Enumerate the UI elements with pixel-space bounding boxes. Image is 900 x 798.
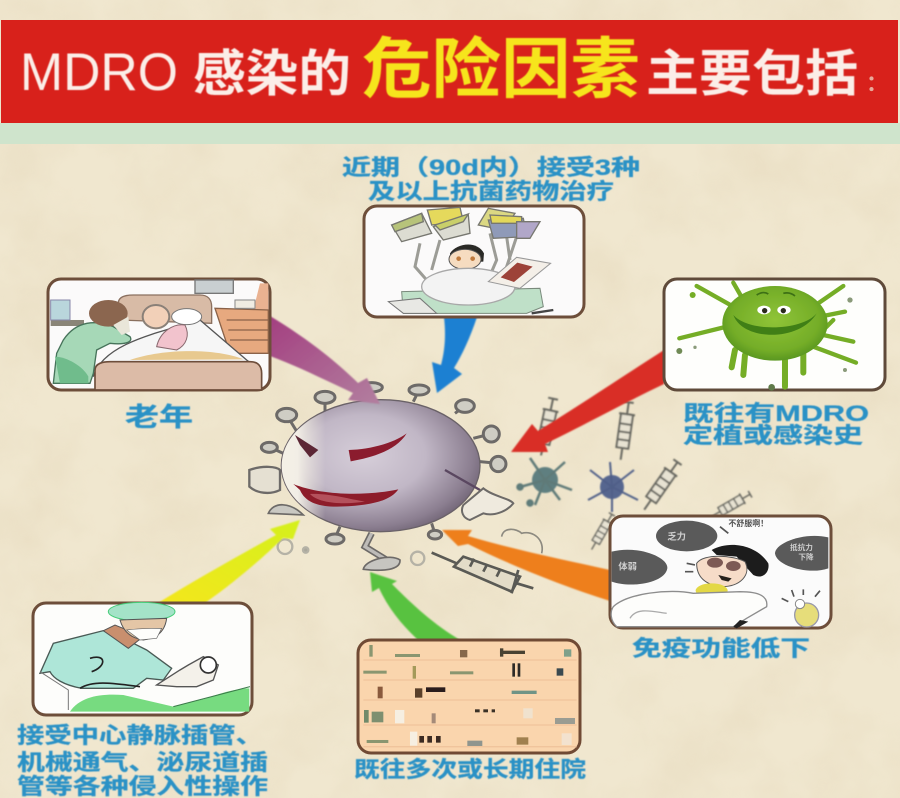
title: white trailing text: 主要包括 xyxy=(646,46,858,102)
arrow: orange from immune panel xyxy=(442,530,610,601)
floor shadows xyxy=(363,660,577,747)
panel frame xyxy=(364,206,584,317)
caption: prior MDRO colonization: 既往有MDRO xyxy=(683,401,869,426)
illustration: nurse and elderly patient xyxy=(51,280,268,390)
virus body xyxy=(281,400,480,532)
virus glove xyxy=(462,488,513,520)
speech bubble words: 体弱 xyxy=(618,560,637,571)
virus eyes xyxy=(295,433,407,461)
virus mouth xyxy=(293,484,398,507)
speech bubble words: 乏力 xyxy=(667,530,686,541)
speech bubble words: 下降 xyxy=(798,551,814,561)
title: white lead text xyxy=(20,43,351,102)
virus legs and feet xyxy=(249,467,400,570)
title: white lead text: MDRO xyxy=(20,43,178,102)
panel frame xyxy=(33,603,252,715)
panel frame xyxy=(48,279,270,390)
caption: invasive procedures: 机械通气、泌尿道插 xyxy=(17,750,268,775)
caption: prior MDRO colonization xyxy=(683,401,869,448)
green band under banner xyxy=(0,123,900,144)
panel frame xyxy=(358,640,580,753)
caption: recent antibiotics: 及以上抗菌药物治疗 xyxy=(368,179,614,204)
title: yellow highlight: 危险因素 xyxy=(362,32,640,106)
decorative bubbles and cloud xyxy=(278,529,542,565)
speech bubble words: 抵抗力 xyxy=(790,542,813,552)
panel: low immunity xyxy=(610,516,831,628)
caption: low immunity: 免疫功能低下 xyxy=(632,636,810,661)
illustration: sick man xyxy=(611,518,828,628)
panel: recent antibiotics xyxy=(364,206,584,317)
germ droplets xyxy=(676,292,853,391)
arrow: purple from elderly panel xyxy=(270,316,380,404)
illustration: surgeon xyxy=(40,602,250,712)
tiny figures xyxy=(363,645,575,746)
caption: invasive procedures xyxy=(17,723,268,798)
arrow: blue from antibiotics panel xyxy=(432,317,477,393)
caption: invasive procedures: 接受中心静脉插管、 xyxy=(17,723,263,748)
illustration: green germ xyxy=(676,283,856,391)
panel: repeated hospitalization xyxy=(358,640,580,753)
arrow: green from hospital panel xyxy=(370,572,460,640)
title: colon: ： xyxy=(866,71,888,96)
small syringe below virus xyxy=(432,553,533,593)
panel frame xyxy=(664,279,885,390)
virus spikes xyxy=(261,383,506,544)
caption: recent antibiotics xyxy=(342,155,640,204)
caption: repeated hospitalization: 既往多次或长期住院 xyxy=(354,757,586,782)
illustration: patient on drips xyxy=(388,207,553,313)
central cartoon virus xyxy=(249,383,542,593)
title: white lead text: 感染的 xyxy=(193,46,351,102)
background syringes and germs xyxy=(518,397,753,552)
panel frame xyxy=(610,516,831,628)
illustration: grid of hospital scenes xyxy=(363,645,577,747)
germ splats xyxy=(679,283,856,387)
caption: prior MDRO colonization: 定植或感染史 xyxy=(683,423,863,448)
speech bubble words: 不舒服啊！ xyxy=(728,518,768,528)
arrow: red from MDRO history panel xyxy=(511,350,664,452)
panel: prior MDRO colonization xyxy=(664,279,885,391)
panel: elderly xyxy=(48,279,270,390)
arrow: yellow from surgeon panel xyxy=(158,520,300,603)
speech bubble words xyxy=(618,518,814,571)
caption: recent antibiotics: 近期（90d内）接受3种 xyxy=(342,155,640,180)
caption: elderly: 老年 xyxy=(125,402,193,432)
title banner xyxy=(1,20,898,123)
panel: invasive procedures xyxy=(33,602,252,715)
